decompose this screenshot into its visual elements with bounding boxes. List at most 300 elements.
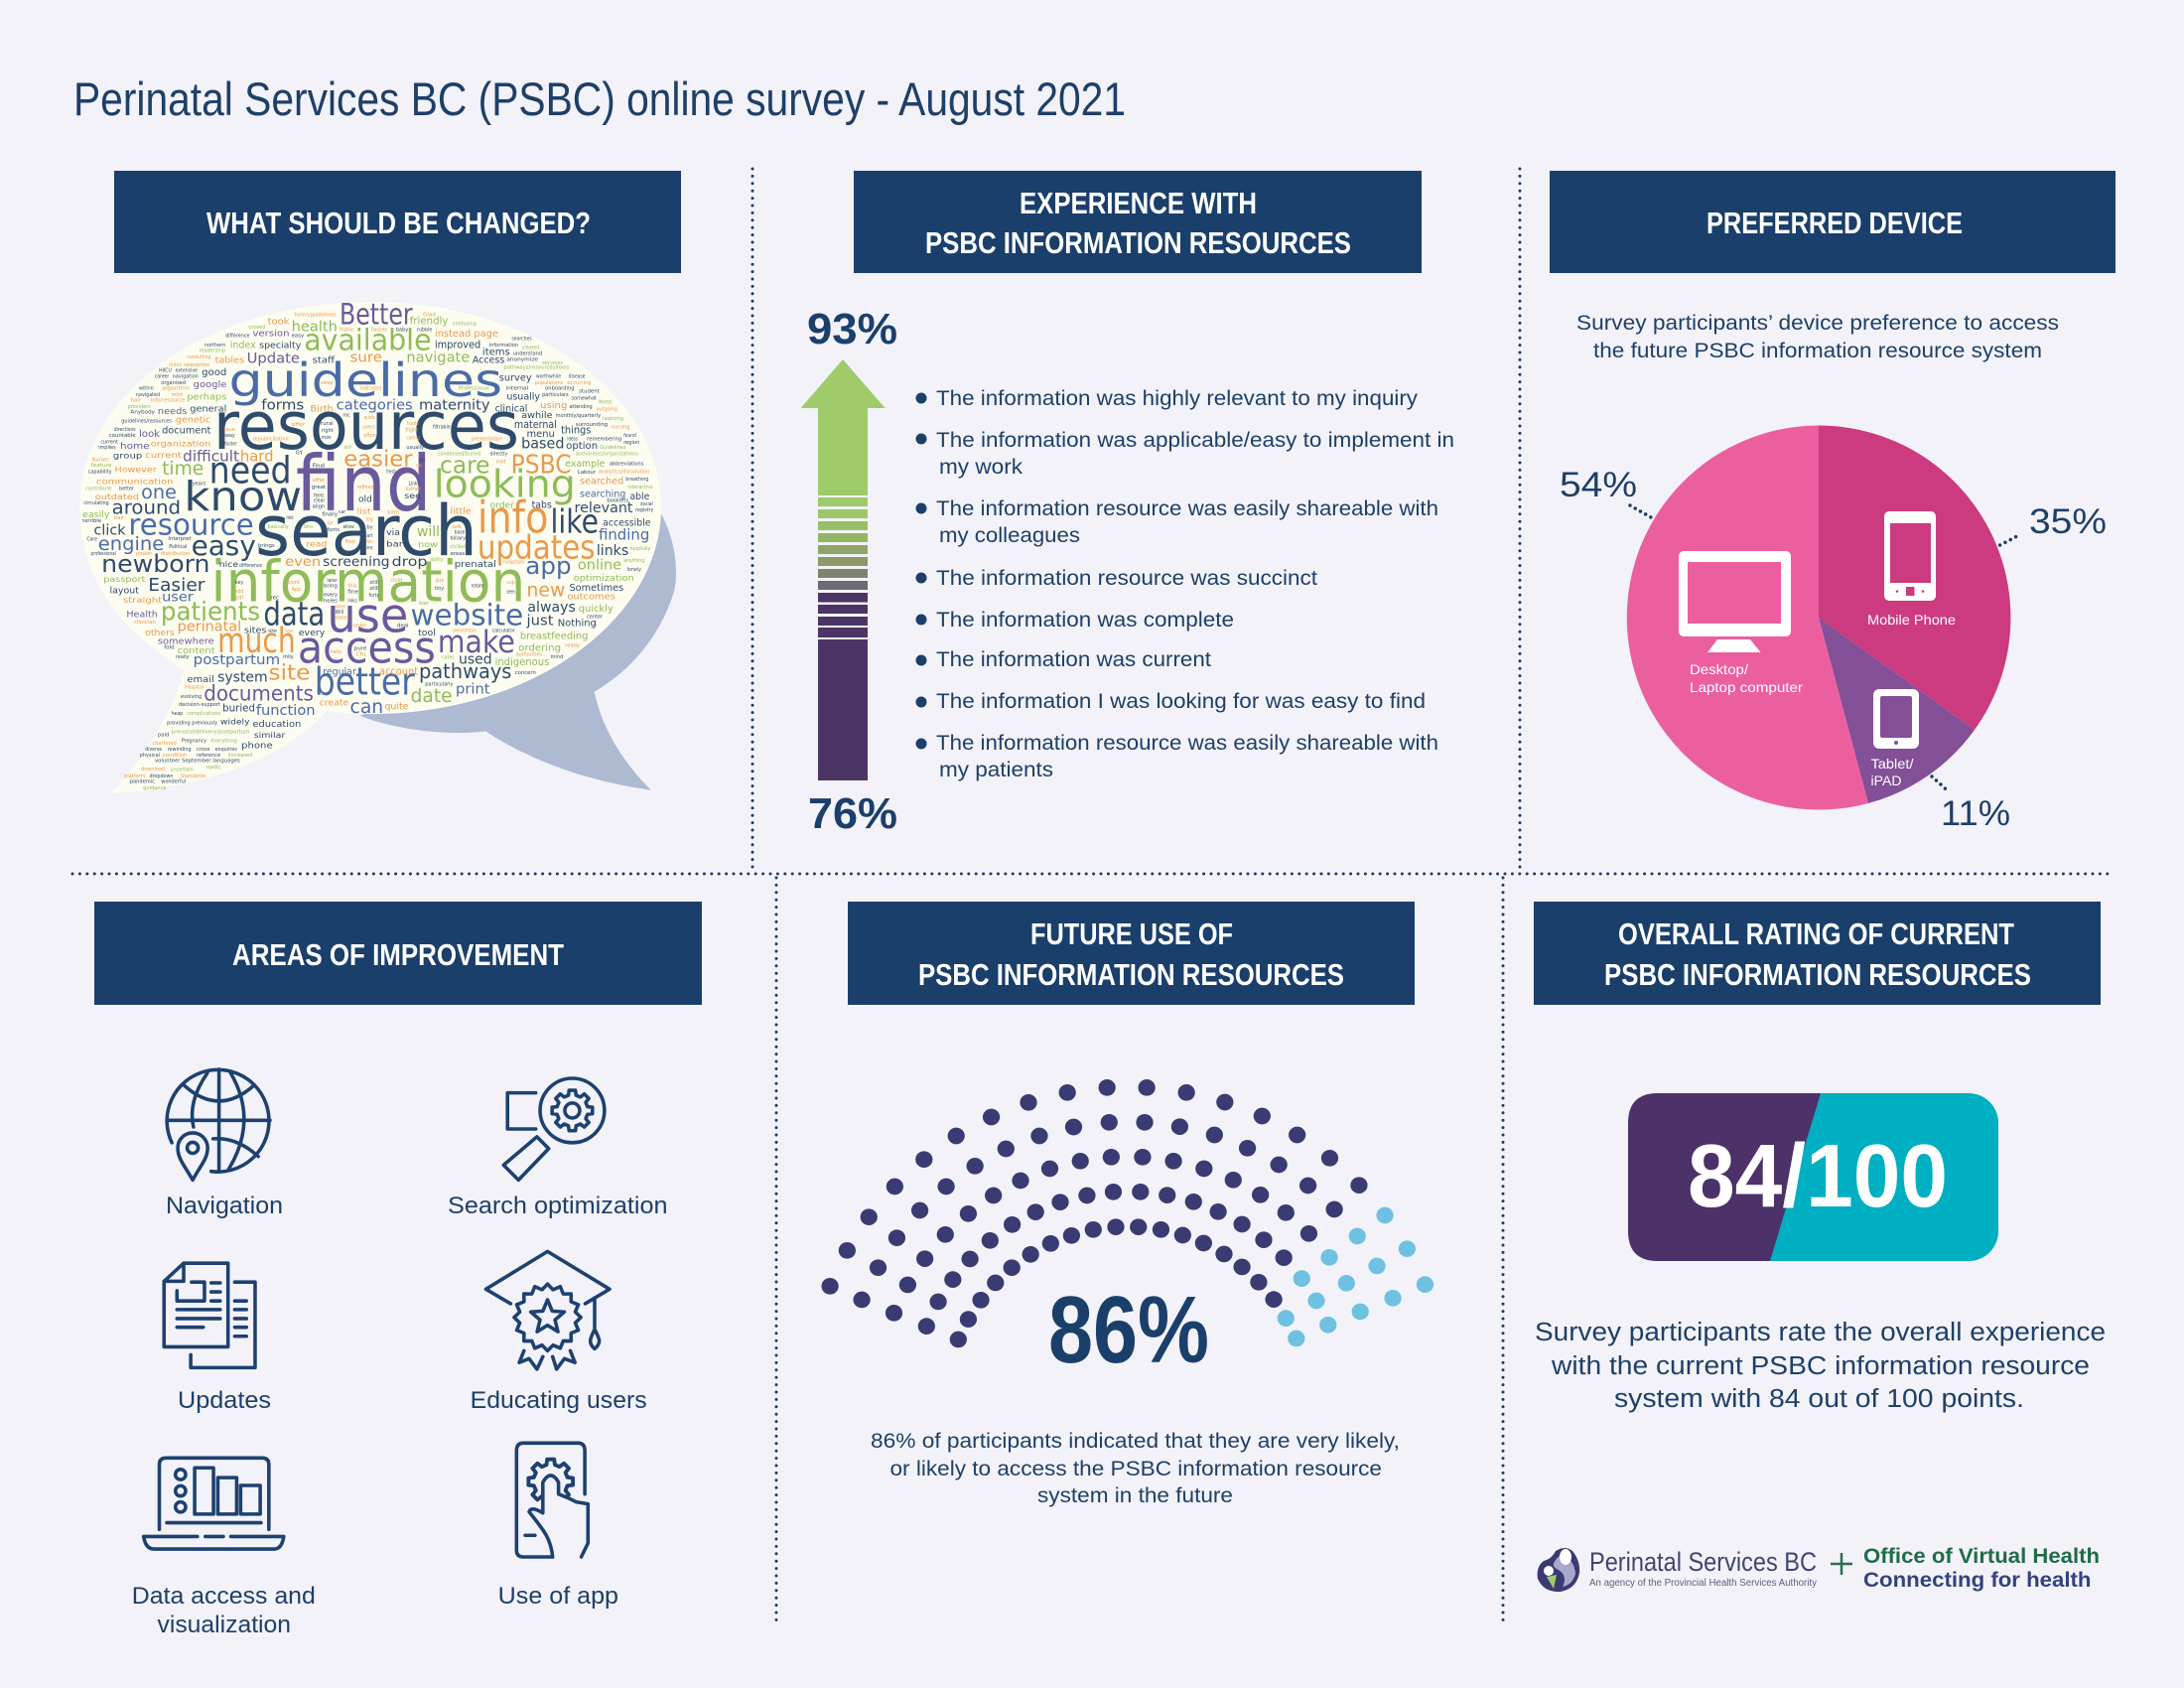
word cloud speech bubble: maternal: [514, 418, 557, 431]
icon: educating users: [485, 1251, 610, 1369]
word cloud speech bubble: outcomes: [567, 593, 615, 602]
word cloud speech bubble: Hospital: [185, 685, 204, 690]
word cloud speech bubble: layout: [110, 586, 139, 596]
word cloud speech bubble: option: [566, 440, 598, 452]
word cloud speech bubble: republicitation: [252, 437, 289, 442]
word cloud speech bubble: authorities: [516, 652, 542, 657]
description text: [871, 1429, 1400, 1507]
word cloud speech bubble: ability: [431, 557, 444, 563]
word cloud speech bubble: engine: [98, 532, 164, 554]
word cloud speech bubble: pathways/resources/tools: [503, 365, 570, 370]
word cloud speech bubble: phone: [241, 741, 273, 751]
word cloud speech bubble: crowd: [248, 325, 265, 331]
word cloud speech bubble: newborn: [101, 551, 210, 578]
word cloud speech bubble: fonts: [327, 527, 340, 533]
word cloud speech bubble: decision-support: [179, 703, 220, 708]
label: navigation: Navigation: [166, 1193, 283, 1219]
logo: Office of Virtual Health: [1863, 1545, 2100, 1592]
word cloud speech bubble: mid: [496, 460, 506, 465]
word cloud speech bubble: navigation: [173, 374, 199, 379]
word cloud speech bubble: authorities/organizations: [576, 452, 638, 457]
word cloud speech bubble: date: [336, 616, 347, 622]
word cloud speech bubble: Interpret: [168, 537, 192, 542]
word cloud speech bubble: somewhere: [158, 636, 214, 646]
word cloud speech bubble: usually: [506, 391, 540, 402]
word cloud speech bubble: analytics/dissolution: [599, 470, 649, 475]
word cloud speech bubble: registry: [635, 507, 654, 513]
bullet list: The information was applicable/easy to implement in: [936, 429, 1454, 452]
word cloud speech bubble: implies: [98, 446, 116, 451]
word cloud speech bubble: Guidelines: [600, 446, 625, 451]
word cloud speech bubble: rural: [321, 422, 334, 427]
word cloud speech bubble: little: [451, 506, 472, 516]
word cloud speech bubble: screening: [323, 554, 390, 570]
word cloud speech bubble: navigate: [406, 350, 470, 365]
callout: 11%: 11%: [1941, 794, 2010, 833]
word cloud speech bubble: group: [113, 451, 142, 461]
word cloud speech bubble: buried: [222, 702, 255, 714]
word cloud speech bubble: info/resource: [151, 398, 186, 403]
word cloud speech bubble: searched: [580, 476, 623, 487]
word cloud speech bubble: listner: [406, 488, 422, 492]
word cloud speech bubble: condensed/buried: [438, 452, 480, 457]
word cloud speech bubble: rather: [268, 630, 277, 634]
heading: what should be changed: [114, 171, 681, 273]
word cloud speech bubble: created: [522, 346, 539, 351]
word cloud speech bubble: administrators: [453, 629, 477, 633]
word cloud speech bubble: usually: [406, 446, 425, 451]
word cloud speech bubble: hair: [131, 398, 142, 403]
word cloud speech bubble: hair: [114, 515, 125, 521]
word cloud speech bubble: create: [320, 698, 348, 708]
word cloud speech bubble: GY: [296, 451, 304, 456]
word cloud speech bubble: learning: [603, 416, 623, 422]
word cloud speech bubble: drop: [392, 554, 427, 570]
word cloud speech bubble: widely: [220, 717, 250, 727]
heading: overall rating: OVERALL RATING OF CURRENT: [1618, 916, 2014, 951]
word cloud speech bubble: social: [640, 501, 653, 507]
word cloud speech bubble: helpfully: [630, 546, 651, 552]
word cloud speech bubble: info: [478, 492, 548, 543]
word cloud speech bubble: heap: [172, 712, 184, 717]
heading: future use: FUTURE USE OF: [1030, 916, 1233, 951]
word cloud speech bubble: navigated: [136, 392, 160, 398]
word cloud speech bubble: populations: [535, 380, 563, 386]
word cloud speech bubble: everything: [210, 739, 237, 744]
word cloud speech bubble: prenatal/delivery/postpartum: [172, 730, 250, 736]
heading: future use: PSBC INFORMATION RESOURCES: [918, 957, 1344, 992]
word cloud speech bubble: based: [521, 435, 564, 453]
word cloud speech bubble: fold: [164, 645, 175, 650]
word cloud speech bubble: enquiries: [215, 747, 237, 753]
word cloud speech bubble: outdated: [95, 492, 139, 502]
word cloud speech bubble: date: [419, 458, 426, 464]
label: use of app: Use of app: [498, 1583, 618, 1610]
word cloud speech bubble: resources: [213, 387, 519, 465]
word cloud speech bubble: services: [542, 360, 563, 366]
word cloud speech bubble: print: [456, 680, 490, 697]
word cloud speech bubble: current: [145, 451, 182, 460]
word cloud speech bubble: organization: [151, 439, 211, 449]
word cloud speech bubble: rec: [271, 596, 279, 602]
word cloud speech bubble: easy: [292, 334, 305, 339]
word cloud speech bubble: uncertain: [171, 768, 194, 773]
word cloud speech bubble: access: [298, 622, 436, 673]
word cloud speech bubble: App: [292, 588, 302, 593]
bullet list: The information was complete: [936, 609, 1234, 632]
word cloud speech bubble: really: [176, 654, 190, 660]
word cloud speech bubble: particularly: [425, 682, 454, 687]
word cloud speech bubble: Final: [313, 464, 325, 469]
word cloud speech bubble: bin: [366, 539, 373, 545]
word cloud speech bubble: find: [296, 440, 432, 529]
heading: experience: EXPERIENCE WITH: [1020, 186, 1257, 220]
word cloud speech bubble: breathing: [625, 477, 648, 483]
word cloud speech bubble: users: [362, 425, 375, 430]
word cloud speech bubble: particulars: [542, 392, 569, 398]
word cloud speech bubble: condition: [163, 754, 187, 759]
word cloud speech bubble: student: [579, 389, 600, 394]
label: tablet: Tablet/: [1870, 756, 1914, 772]
word cloud speech bubble: friendly: [410, 315, 449, 327]
word cloud speech bubble: foster: [224, 442, 238, 448]
word cloud speech bubble: email: [187, 675, 214, 685]
word cloud speech bubble: baby: [396, 328, 409, 333]
word cloud speech bubble: via: [386, 528, 400, 538]
word cloud speech bubble: anonymize: [506, 357, 539, 362]
word cloud speech bubble: perinatal: [178, 619, 241, 634]
description text: [1535, 1319, 2106, 1413]
word cloud speech bubble: center: [587, 615, 604, 620]
word cloud speech bubble: now: [418, 540, 438, 550]
word cloud speech bubble: monthly/quarterly: [556, 414, 602, 419]
icon: navigation globe: [167, 1069, 270, 1180]
word cloud speech bubble: [79, 298, 676, 793]
word cloud speech bubble: every: [299, 629, 325, 638]
word cloud speech bubble: information: [489, 343, 518, 349]
word cloud speech bubble: document: [162, 425, 210, 436]
word cloud speech bubble: region: [623, 440, 639, 446]
word cloud speech bubble: Links: [408, 482, 420, 487]
word cloud speech bubble: cates: [442, 655, 455, 660]
label: desktop: Laptop computer: [1690, 679, 1803, 695]
word cloud speech bubble: guidelines/resources: [121, 419, 172, 424]
word cloud speech bubble: every: [324, 593, 339, 598]
intro text: Survey participants’ device preference to access: [1576, 311, 2059, 335]
heading: what should be changed: WHAT SHOULD BE CHANGED?: [206, 206, 591, 240]
word cloud speech bubble: terrible: [82, 519, 102, 524]
icon: data access laptop: [144, 1458, 284, 1549]
word cloud speech bubble: able: [630, 492, 649, 502]
word cloud speech bubble: for: [327, 521, 334, 526]
word cloud speech bubble: chartered: [152, 742, 177, 747]
word cloud speech bubble: health: [292, 319, 338, 335]
word cloud speech bubble: things: [561, 424, 591, 436]
word cloud speech bubble: holes: [324, 599, 338, 604]
word cloud speech bubble: search: [255, 491, 478, 572]
label: desktop: [1690, 661, 1803, 695]
word cloud speech bubble: google: [194, 380, 226, 390]
word cloud speech bubble: mily: [283, 654, 294, 660]
word cloud speech bubble: Easier: [148, 574, 205, 596]
word cloud speech bubble: perhaps: [187, 392, 226, 402]
word cloud speech bubble: directly: [490, 452, 508, 457]
word cloud speech bubble: difference: [225, 334, 250, 339]
word cloud speech bubble: add: [235, 589, 243, 595]
word cloud speech bubble: better: [119, 487, 135, 492]
word cloud speech bubble: date: [411, 684, 453, 707]
word cloud speech bubble: function: [256, 702, 316, 719]
word cloud speech bubble: later: [336, 605, 346, 610]
word cloud speech bubble: can: [350, 695, 383, 718]
word cloud speech bubble: finally: [322, 512, 339, 517]
word cloud speech bubble: much: [217, 622, 296, 661]
word cloud speech bubble: even: [285, 554, 321, 570]
word cloud speech bubble: brings: [258, 543, 275, 549]
word cloud speech bubble: used: [459, 650, 492, 667]
word cloud speech bubble: education: [252, 720, 301, 730]
label: data access and visualization: [132, 1583, 316, 1638]
word cloud speech bubble: capability: [88, 470, 112, 475]
logo: Office of Virtual Health: Connecting for health: [1863, 1569, 2091, 1592]
heading: future use: [848, 902, 1415, 1005]
word cloud speech bubble: searches: [511, 337, 532, 342]
word cloud speech bubble: relevant: [575, 498, 632, 515]
word cloud speech bubble: However: [115, 465, 157, 475]
big number: 86%: 86%: [1048, 1277, 1209, 1383]
word cloud speech bubble: use: [327, 588, 408, 643]
word cloud speech bubble: sites: [244, 626, 266, 635]
word cloud speech bubble: ideas: [567, 437, 578, 442]
word cloud speech bubble: instead page: [435, 328, 498, 340]
word cloud speech bubble: Anybody: [131, 410, 156, 416]
bullet list: The information resource was easily shareable with: [936, 732, 1438, 755]
word cloud speech bubble: example: [565, 458, 606, 470]
bullet list: The information resource was succinct: [936, 567, 1317, 590]
word cloud speech bubble: complications: [187, 712, 220, 717]
bullet list: The information was highly relevant to my inquiry: [936, 387, 1419, 410]
word cloud speech bubble: feature: [91, 464, 112, 469]
word cloud speech bubble: professional: [91, 551, 116, 557]
description text: system in the future: [1037, 1483, 1233, 1507]
word cloud speech bubble: roc: [342, 413, 350, 418]
word cloud speech bubble: accessible: [603, 518, 651, 528]
word cloud speech bubble: improved: [435, 339, 480, 351]
word cloud speech bubble: user: [162, 590, 194, 605]
word cloud speech bubble: rotate: [472, 584, 484, 589]
word cloud speech bubble: data: [263, 595, 325, 633]
word cloud speech bubble: Better: [340, 298, 413, 332]
word cloud speech bubble: by: [366, 525, 373, 530]
word cloud speech bubble: tabs: [532, 498, 552, 510]
word cloud speech bubble: just: [526, 612, 554, 629]
word cloud speech bubble: outgoing: [597, 407, 617, 412]
word cloud speech bubble: evolving: [181, 694, 202, 700]
heading: preferred device: [1550, 171, 2116, 273]
word cloud speech bubble: nursing: [612, 425, 630, 430]
score badge: [1628, 1093, 1998, 1261]
word cloud speech bubble: quick: [363, 415, 375, 421]
word cloud speech bubble: birth: [387, 510, 399, 515]
word cloud speech bubble: ordering: [518, 641, 561, 653]
pie chart: [1627, 425, 2010, 809]
description text: 86% of participants indicated that they are very likely,: [871, 1429, 1400, 1453]
word cloud speech bubble: others: [145, 629, 175, 638]
word cloud speech bubble: see: [404, 492, 421, 500]
word cloud speech bubble: indicated: [360, 386, 381, 391]
icon: mobile phone: [1884, 511, 1936, 601]
word cloud speech bubble: order: [490, 500, 515, 510]
word cloud speech bubble: tiny: [435, 587, 445, 592]
word cloud speech bubble: within: [139, 386, 154, 391]
word cloud speech bubble: countable: [109, 434, 136, 439]
word cloud speech bubble: forty: [368, 593, 380, 599]
word cloud speech bubble: took: [268, 317, 290, 327]
word cloud speech bubble: resource: [128, 507, 254, 541]
word cloud speech bubble: base: [455, 530, 466, 535]
word cloud speech bubble: clear: [314, 498, 326, 503]
word cloud speech bubble: similar: [254, 731, 286, 741]
word cloud speech bubble: skill: [343, 446, 351, 451]
word cloud speech bubble: Glad: [423, 313, 436, 318]
label: desktop: Desktop/: [1690, 661, 1748, 677]
word cloud speech bubble: know: [184, 473, 302, 520]
intro text: [1576, 311, 2059, 362]
word cloud speech bubble: breastfeeding: [520, 630, 588, 641]
heading: experience: PSBC INFORMATION RESOURCES: [925, 225, 1351, 260]
word cloud speech bubble: feels: [314, 493, 325, 498]
word cloud speech bubble: wonderful: [161, 779, 186, 784]
word cloud speech bubble: years: [193, 482, 205, 487]
word cloud speech bubble: difficult: [183, 448, 239, 466]
panel: areas of improvement: [94, 902, 702, 1638]
word cloud speech bubble: CRL: [356, 652, 366, 657]
word cloud speech bubble: guidance: [143, 785, 167, 791]
word cloud speech bubble: items: [482, 347, 510, 357]
word cloud speech bubble: away: [222, 434, 236, 439]
word cloud speech bubble: system: [217, 668, 268, 685]
word cloud speech bubble: documents: [204, 681, 314, 706]
word cloud speech bubble: filter: [344, 539, 356, 545]
word cloud speech bubble: bring: [324, 584, 338, 589]
word cloud speech bubble: staff: [313, 355, 336, 365]
bullet list: my patients: [939, 759, 1053, 781]
word cloud speech bubble: look: [139, 428, 161, 440]
word cloud speech bubble: Care: [86, 537, 97, 542]
label: tablet: iPAD: [1870, 773, 1902, 788]
icon: plus: [1831, 1553, 1852, 1575]
label: search optimization: Search optimization: [448, 1193, 668, 1219]
word cloud speech bubble: mind: [551, 654, 563, 660]
word cloud speech bubble: Nurses: [92, 458, 109, 463]
word cloud speech bubble: straight: [123, 596, 163, 606]
word cloud speech bubble: Political: [169, 544, 187, 550]
word cloud speech bubble: specialty: [259, 341, 301, 351]
callout: 54%: [1560, 466, 1651, 517]
word cloud speech bubble: sleep: [321, 380, 334, 386]
word cloud speech bubble: great: [312, 485, 326, 491]
word cloud speech bubble: difference: [239, 563, 263, 569]
icon: desktop: [1679, 551, 1791, 652]
word cloud speech bubble: easily: [82, 510, 110, 520]
word cloud speech bubble: later: [327, 578, 339, 584]
word cloud speech bubble: passport: [103, 575, 146, 585]
word cloud speech bubble: site: [268, 660, 311, 685]
word cloud speech bubble: point: [287, 581, 300, 586]
word cloud speech bubble: forms: [261, 396, 304, 413]
word cloud speech bubble: internal: [506, 386, 528, 391]
word cloud speech bubble: Standards: [181, 774, 205, 779]
word cloud speech bubble: Will: [336, 611, 343, 616]
word cloud speech bubble: quickly: [579, 603, 614, 614]
word cloud speech bubble: Pregnancy: [182, 739, 207, 744]
panel: overall rating: [1534, 902, 2106, 1592]
word cloud speech bubble: Access: [473, 353, 505, 365]
word cloud speech bubble: current: [100, 440, 118, 445]
word cloud speech bubble: regular: [323, 666, 356, 677]
word cloud speech bubble: leadership: [200, 349, 226, 354]
word cloud speech bubble: read: [306, 539, 328, 549]
word cloud speech bubble: non: [285, 630, 294, 634]
word cloud speech bubble: diverse: [145, 747, 163, 753]
bullet list: The information was current: [936, 648, 1211, 671]
label: data access and visualization: visualization: [157, 1612, 291, 1638]
bullet list: my work: [939, 456, 1024, 479]
heading: overall rating: PSBC INFORMATION RESOURCES: [1604, 957, 2031, 992]
word cloud speech bubble: need: [209, 449, 292, 492]
word cloud speech bubble: mine: [172, 392, 184, 398]
word cloud speech bubble: order: [353, 624, 367, 629]
word cloud speech bubble: hard: [240, 448, 274, 466]
word cloud speech bubble: remembering: [587, 437, 621, 442]
word cloud speech bubble: care: [440, 452, 490, 480]
panel: experience with PSBC information resources: [801, 171, 1454, 838]
word cloud speech bubble: regarding: [206, 765, 220, 771]
word cloud speech bubble: presentation: [472, 437, 502, 442]
word cloud speech bubble: time: [162, 457, 204, 480]
word cloud speech bubble: prenatal: [455, 560, 496, 570]
word cloud speech bubble: save: [223, 427, 235, 433]
word cloud speech bubble: any: [366, 546, 373, 551]
word cloud speech bubble: lonely: [627, 568, 642, 573]
word cloud speech bubble: click: [94, 521, 126, 538]
heading: preferred device: PREFERRED DEVICE: [1706, 206, 1963, 240]
word cloud speech bubble: link: [287, 515, 294, 521]
word cloud speech bubble: providing previously: [167, 721, 218, 726]
word cloud speech bubble: easy: [192, 530, 256, 562]
description text: with the current PSBC information resource: [1551, 1352, 2090, 1380]
word cloud speech bubble: paid: [158, 733, 169, 738]
word cloud speech bubble: pathways: [419, 660, 511, 683]
word cloud speech bubble: organised: [161, 380, 186, 386]
word cloud speech bubble: Labour: [578, 470, 597, 476]
word cloud speech bubble: communication: [96, 478, 174, 487]
word cloud speech bubble: surrounding: [576, 422, 608, 428]
logo: Perinatal Services BC: [1538, 1547, 1818, 1592]
heading: experience: [854, 171, 1422, 273]
label: educating users: Educating users: [471, 1387, 647, 1414]
icon: search optimization: [503, 1078, 605, 1180]
word cloud speech bubble: car: [339, 509, 346, 515]
word cloud speech bubble: menu: [527, 428, 555, 440]
word cloud speech bubble: fresh: [386, 470, 396, 475]
parliament dot chart: [821, 1079, 1433, 1347]
word cloud speech bubble: volunteer September languages: [155, 759, 240, 764]
word cloud speech bubble: using: [540, 401, 567, 411]
word cloud speech bubble: found: [623, 434, 636, 439]
label: 76%: 76%: [808, 789, 897, 838]
word cloud speech bubble: physical: [140, 754, 160, 759]
